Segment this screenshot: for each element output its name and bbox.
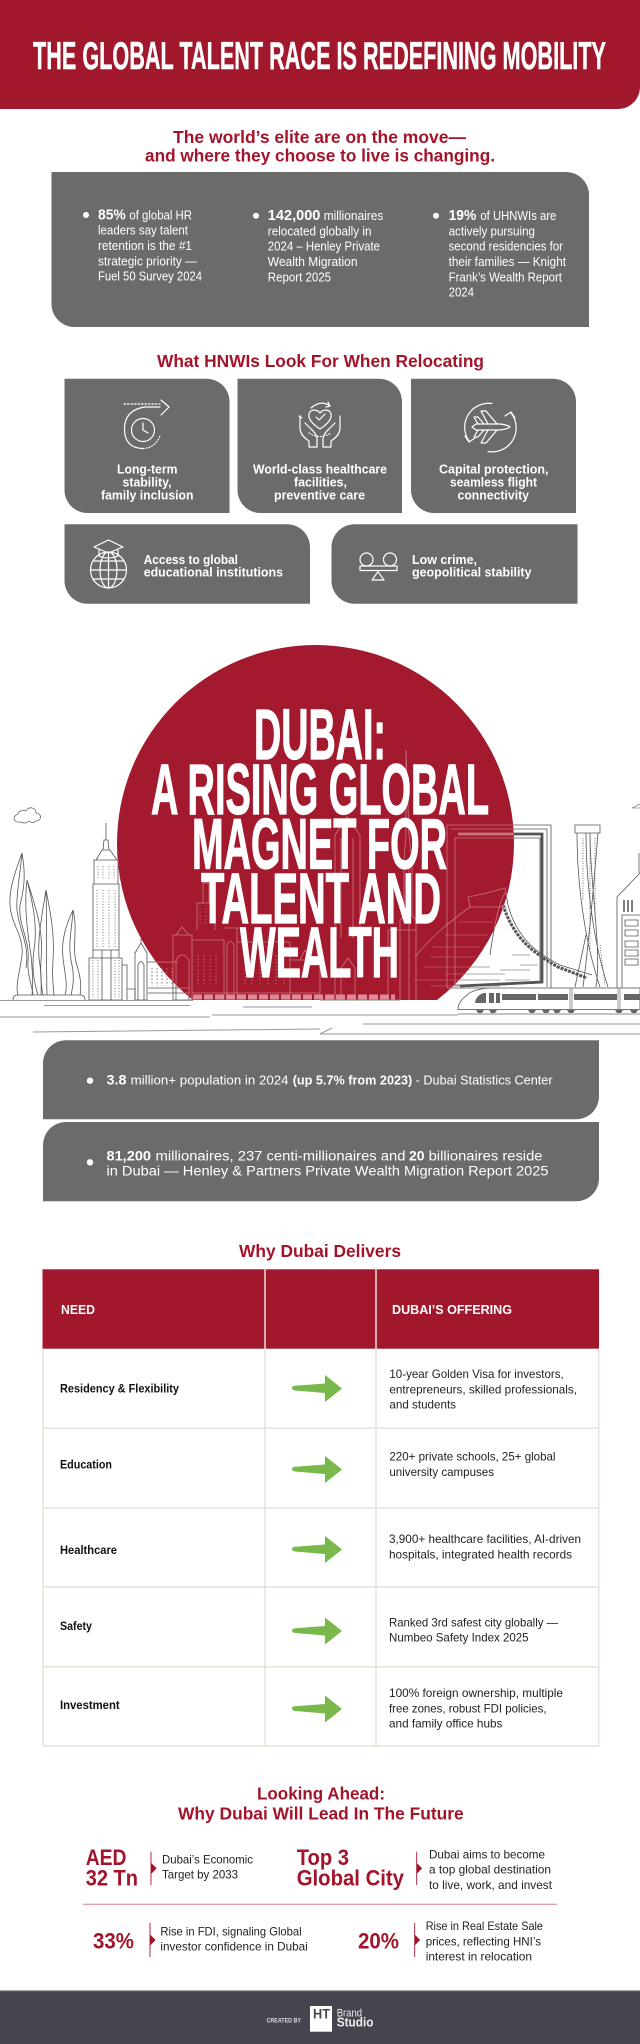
panel: population stat bbox=[43, 1040, 599, 1119]
logo: HT Brand Studio bbox=[310, 2005, 374, 2032]
stat: 142,000 millionaires: 2024 – Henley Private bbox=[268, 240, 380, 254]
label: capital protection bbox=[439, 462, 548, 502]
row: residency bbox=[60, 1367, 577, 1412]
stat: 19% of UHNWIs: 2024 bbox=[449, 286, 474, 300]
label: long-term stability: stability, bbox=[122, 476, 172, 490]
card: low crime bbox=[332, 524, 578, 604]
stat: 20% real estate: Rise in Real Estate Sale bbox=[426, 1919, 543, 1933]
table header: DUBAI’S OFFERING bbox=[392, 1302, 512, 1317]
arrow bbox=[292, 1618, 342, 1644]
train bbox=[458, 988, 640, 1014]
label: global education: Access to global bbox=[144, 553, 238, 567]
icon: plane in circular arrows bbox=[465, 403, 516, 452]
row: investment: 100% foreign ownership, multiple bbox=[389, 1686, 563, 1700]
label: healthcare bbox=[253, 462, 387, 502]
stat: 20% real estate: interest in relocation bbox=[426, 1950, 532, 1964]
stat: top 3 global city: a top global destination bbox=[429, 1863, 551, 1877]
stat: AED 32 Tn: 32 Tn bbox=[86, 1866, 138, 1891]
heading: looking ahead: Why Dubai Will Lead In The Future bbox=[178, 1803, 464, 1823]
table: need vs Dubai's offering bbox=[42, 1269, 599, 1746]
stat: 142,000 millionaires bbox=[253, 207, 383, 284]
row: education: Education bbox=[60, 1460, 112, 1472]
label: long-term stability: Long-term bbox=[117, 462, 178, 476]
stat: AED 32 Tn: AED bbox=[86, 1845, 126, 1870]
ground lines bbox=[0, 1000, 640, 1034]
row: education bbox=[60, 1450, 556, 1483]
text: population: (up 5.7% from 2023) bbox=[293, 1072, 412, 1087]
stat: 142,000 millionaires: 142,000 bbox=[268, 207, 320, 224]
icon: balance scale bbox=[360, 553, 397, 580]
label: capital protection: Capital protection, bbox=[439, 462, 548, 476]
stat: 142,000 millionaires: relocated globally in bbox=[268, 224, 372, 238]
stat: 19% of UHNWIs bbox=[433, 207, 566, 300]
icon: globe with graduation cap bbox=[90, 540, 126, 588]
arrow bbox=[292, 1375, 342, 1402]
stat: 19% of UHNWIs: actively pursuing bbox=[449, 224, 535, 238]
label: global education: educational institutions bbox=[144, 566, 283, 580]
credit: created by: CREATED BY bbox=[266, 2018, 302, 2025]
row: safety bbox=[60, 1615, 558, 1645]
table header bbox=[42, 1269, 599, 1349]
label: healthcare: facilities, bbox=[294, 476, 347, 490]
stat: 85% of HR leaders: of global HR bbox=[129, 208, 192, 222]
arrow bbox=[292, 1456, 342, 1483]
card: global education bbox=[64, 524, 310, 604]
row: investment: and family office hubs bbox=[389, 1717, 502, 1731]
text: millionaires in Dubai: in Dubai — Henley & Partners Private Wealth Migration Report 2025 bbox=[106, 1163, 548, 1178]
text: population: 3.8 bbox=[106, 1072, 127, 1087]
stat: 142,000 millionaires: Report 2025 bbox=[268, 270, 331, 284]
row: safety: Safety bbox=[60, 1621, 93, 1633]
illustration: Dubai skyline bbox=[0, 645, 640, 1034]
label: capital protection: connectivity bbox=[458, 488, 529, 502]
stat: 142,000 millionaires: millionaires bbox=[324, 209, 383, 223]
stat: 19% of UHNWIs: 19% bbox=[449, 207, 476, 224]
row: residency: Residency & Flexibility bbox=[60, 1383, 180, 1395]
row: healthcare: Healthcare bbox=[60, 1545, 117, 1557]
subtitle bbox=[145, 127, 495, 166]
panel: key statistics bbox=[52, 172, 589, 327]
text: population: million+ population in 2024 bbox=[131, 1072, 289, 1087]
stat: 19% of UHNWIs: their families — Knight bbox=[449, 255, 566, 269]
heading: looking ahead bbox=[178, 1783, 464, 1823]
arrow bbox=[292, 1696, 342, 1722]
logo: HT Brand Studio: HT bbox=[313, 2005, 330, 2021]
row: investment: Investment bbox=[60, 1700, 120, 1712]
label: healthcare: preventive care bbox=[274, 488, 365, 502]
hero title: TALENT AND bbox=[201, 860, 441, 939]
subtitle: The world’s elite are on the move— bbox=[173, 127, 466, 147]
stat: AED 32 Tn: Target by 2033 bbox=[162, 1868, 238, 1882]
row: education: university campuses bbox=[389, 1465, 494, 1479]
scalloped base band bbox=[193, 994, 395, 1000]
row: investment: free zones, robust FDI policies, bbox=[389, 1701, 546, 1715]
heading: why Dubai delivers: Why Dubai Delivers bbox=[239, 1241, 401, 1261]
row: healthcare bbox=[60, 1532, 581, 1563]
logo: HT Brand Studio: Brand bbox=[337, 2008, 362, 2020]
text: millionaires in Dubai: 20 bbox=[409, 1149, 424, 1164]
stat: top 3 global city bbox=[297, 1845, 553, 1892]
row: residency: and students bbox=[389, 1398, 456, 1412]
header banner bbox=[0, 0, 640, 109]
label: healthcare: World-class healthcare bbox=[253, 462, 387, 476]
stat: AED 32 Tn bbox=[86, 1845, 253, 1891]
row: residency: 10-year Golden Visa for investors, bbox=[389, 1367, 564, 1381]
stat: 33% FDI: investor confidence in Dubai bbox=[160, 1940, 308, 1954]
stat: 20% real estate: 20% bbox=[358, 1929, 399, 1954]
stat: 20% real estate bbox=[358, 1919, 543, 1964]
row: healthcare: hospitals, integrated health records bbox=[389, 1547, 572, 1561]
stat: 33% FDI: 33% bbox=[93, 1929, 134, 1954]
stat: 142,000 millionaires: Wealth Migration bbox=[268, 255, 358, 269]
stat: 33% FDI bbox=[93, 1923, 308, 1957]
text: millionaires in Dubai: 81,200 bbox=[106, 1149, 151, 1164]
stat: 85% of HR leaders: 85% bbox=[98, 206, 126, 224]
stat: top 3 global city: Global City bbox=[297, 1866, 405, 1891]
row: safety: Ranked 3rd safest city globally — bbox=[389, 1615, 558, 1629]
panel: wealth stat bbox=[43, 1122, 599, 1201]
stat: 19% of UHNWIs: second residencies for bbox=[449, 240, 563, 254]
stat: 85% of HR leaders: leaders say talent bbox=[98, 224, 188, 238]
stat: 85% of HR leaders: strategic priority — bbox=[98, 254, 197, 268]
stat: top 3 global city: Dubai aims to become bbox=[429, 1847, 545, 1861]
hero title: DUBAI: bbox=[254, 696, 386, 775]
text: population: - Dubai Statistics Center bbox=[416, 1072, 553, 1087]
row: healthcare: 3,900+ healthcare facilities, AI-driven bbox=[389, 1532, 581, 1546]
icon: clock with arrow bbox=[124, 400, 169, 448]
label: long-term stability bbox=[101, 462, 194, 502]
label: global education bbox=[144, 553, 283, 580]
logo: HT Brand Studio: Studio bbox=[337, 2015, 374, 2030]
icon: heart in hands bbox=[299, 402, 340, 447]
text: millionaires in Dubai: millionaires, 237 centi-millionaires and bbox=[156, 1149, 406, 1164]
stat: 19% of UHNWIs: of UHNWIs are bbox=[480, 209, 556, 223]
heading: what HNWIs look for: What HNWIs Look For When Relocating bbox=[157, 351, 484, 371]
stat: top 3 global city: Top 3 bbox=[297, 1845, 349, 1870]
arrow bbox=[292, 1536, 342, 1563]
label: low crime: geopolitical stability bbox=[412, 566, 532, 580]
heading: looking ahead: Looking Ahead: bbox=[257, 1783, 385, 1803]
subtitle: and where they choose to live is changing. bbox=[145, 146, 495, 166]
label: low crime: Low crime, bbox=[412, 553, 477, 567]
text: millionaires in Dubai: billionaires reside bbox=[429, 1149, 542, 1164]
table header: NEED bbox=[61, 1302, 95, 1317]
stat: 33% FDI: Rise in FDI, signaling Global bbox=[160, 1924, 302, 1938]
cloud bbox=[14, 808, 40, 823]
card: long-term stability bbox=[64, 379, 230, 513]
row: safety: Numbeo Safety Index 2025 bbox=[389, 1631, 529, 1645]
row: residency: entrepreneurs, skilled professionals, bbox=[389, 1382, 577, 1396]
stat: 20% real estate: prices, reflecting HNI’s bbox=[426, 1934, 541, 1948]
red circle bbox=[117, 645, 514, 1000]
stat: AED 32 Tn: Dubai’s Economic bbox=[162, 1852, 253, 1866]
card: capital protection bbox=[411, 379, 576, 513]
card: healthcare bbox=[238, 379, 402, 513]
stat: top 3 global city: to live, work, and invest bbox=[429, 1878, 553, 1892]
hero title bbox=[151, 696, 489, 993]
hero title: WEALTH bbox=[240, 914, 399, 993]
stat: 85% of HR leaders: Fuel 50 Survey 2024 bbox=[98, 270, 202, 284]
stat: 85% of HR leaders: retention is the #1 bbox=[98, 239, 192, 253]
row: education: 220+ private schools, 25+ global bbox=[389, 1450, 556, 1464]
small plane bbox=[632, 804, 640, 808]
label: long-term stability: family inclusion bbox=[101, 488, 194, 502]
label: low crime bbox=[412, 553, 532, 580]
footer bbox=[0, 1991, 640, 2044]
text: millionaires in Dubai bbox=[87, 1149, 549, 1178]
stat: 19% of UHNWIs: Frank’s Wealth Report bbox=[449, 270, 562, 284]
stat: 85% of HR leaders bbox=[83, 206, 202, 284]
text: population bbox=[87, 1072, 553, 1087]
row: investment bbox=[60, 1686, 563, 1731]
label: capital protection: seamless flight bbox=[450, 476, 538, 490]
